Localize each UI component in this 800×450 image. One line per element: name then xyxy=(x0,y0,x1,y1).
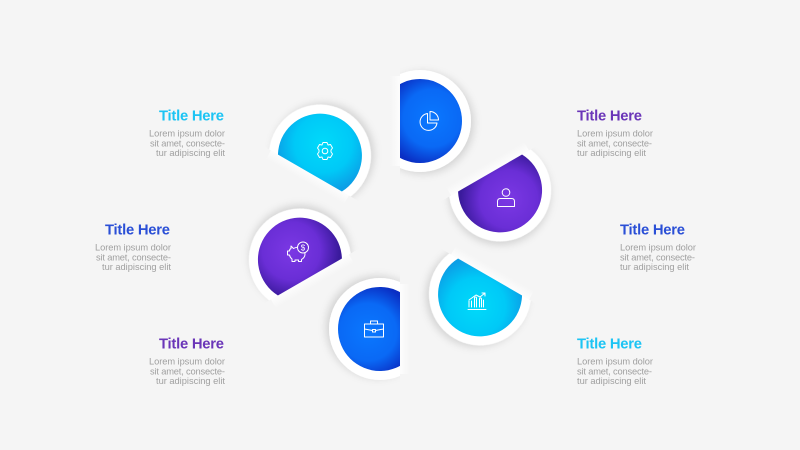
icon: pie chart xyxy=(420,112,438,130)
segment: lower right cyan xyxy=(424,252,530,350)
text block: upper right: Title Here xyxy=(577,108,642,124)
text block: upper left: Lorem ipsum dolor xyxy=(149,128,225,138)
text block: middle right: sit amet, consecte- xyxy=(620,252,695,262)
segment: lower left purple xyxy=(246,202,354,300)
text block: upper right: Lorem ipsum dolor xyxy=(577,128,653,138)
text block: lower right: Lorem ipsum dolor xyxy=(577,356,653,366)
text block: middle right: Lorem ipsum dolor xyxy=(620,242,696,252)
text block: middle right: tur adipiscing elit xyxy=(620,262,689,272)
text block: lower left xyxy=(149,336,225,386)
segment: top blue xyxy=(400,70,476,176)
text block: lower right xyxy=(577,336,653,386)
icon: growth chart xyxy=(468,293,486,310)
semicircle: lower right cyan xyxy=(424,252,530,350)
text block: lower left: Lorem ipsum dolor xyxy=(149,356,225,366)
text block: middle left: Lorem ipsum dolor xyxy=(95,242,171,252)
text block: upper left: tur adipiscing elit xyxy=(156,148,225,158)
semicircle: bottom blue xyxy=(324,274,400,380)
text block: upper left: sit amet, consecte- xyxy=(150,138,225,148)
text block: lower left: sit amet, consecte- xyxy=(150,366,225,376)
text block: upper right: sit amet, consecte- xyxy=(577,138,652,148)
icon: gear xyxy=(318,142,332,160)
icon: person xyxy=(498,189,514,206)
text block: middle right xyxy=(620,222,696,272)
text block: middle right: Title Here xyxy=(620,222,685,238)
text block: upper right xyxy=(577,108,653,158)
text block: upper left xyxy=(149,108,225,158)
text block: middle left xyxy=(95,222,171,272)
segment: upper right purple xyxy=(446,150,554,248)
text block: lower right: Title Here xyxy=(577,336,642,352)
text block: middle left: Title Here xyxy=(105,222,170,238)
segment: bottom blue xyxy=(324,274,400,380)
text block: lower right: tur adipiscing elit xyxy=(577,376,646,386)
icon: briefcase xyxy=(364,321,384,337)
semicircle: upper right purple xyxy=(446,150,554,248)
text block: upper left: Title Here xyxy=(159,108,224,124)
text block: upper right: tur adipiscing elit xyxy=(577,148,646,158)
segment: upper left cyan xyxy=(270,100,376,198)
text block: middle left: tur adipiscing elit xyxy=(102,262,171,272)
semicircle: lower left purple xyxy=(246,202,354,300)
text block: middle left: sit amet, consecte- xyxy=(96,252,171,262)
semicircle: top blue xyxy=(400,70,476,176)
text block: lower left: tur adipiscing elit xyxy=(156,376,225,386)
text block: lower left: Title Here xyxy=(159,336,224,352)
text block: lower right: sit amet, consecte- xyxy=(577,366,652,376)
icon: piggy bank: $ xyxy=(301,244,306,252)
semicircle: upper left cyan xyxy=(270,100,376,198)
